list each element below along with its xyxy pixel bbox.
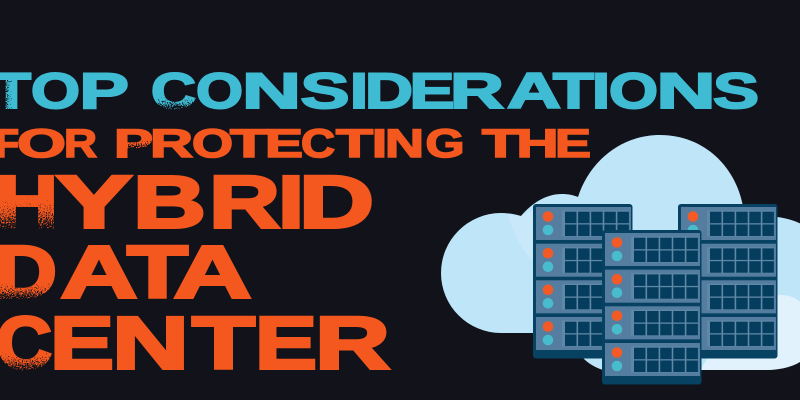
heading: data: A [174,230,252,314]
heading: top considerations: O [31,62,80,119]
heading: top considerations: C [151,62,196,119]
heading: hybrid: D [299,160,374,244]
heading: center: R [315,302,390,384]
heading: top considerations: P [80,62,128,119]
heading: for protecting the: R [64,122,97,166]
server rack: left [533,204,632,358]
heading: for protecting the: C [301,122,335,166]
distressed grain texture on letters [0,80,196,371]
heading: hybrid: R [209,160,280,244]
heading: for protecting the: H [516,122,558,166]
heading: for protecting the: R [150,122,193,166]
heading: top considerations: O [196,62,243,119]
heading: top considerations: R [450,62,504,119]
heading: center: N [112,302,189,384]
heading: hybrid: I [278,160,304,244]
heading: top considerations: E [410,62,454,119]
heading: for protecting the: T [482,122,519,166]
heading: data: A [60,230,138,314]
heading: top considerations: N [656,62,716,119]
heading: top considerations: N [242,62,301,119]
heading: center: E [50,302,114,384]
heading: center: E [255,302,317,384]
heading: hybrid: B [133,160,206,244]
heading: for protecting the: G [426,122,464,166]
heading: for protecting the: E [555,122,591,166]
cloud highlight: left wedge [508,210,533,261]
heading: for protecting the: O [17,122,66,166]
heading: top considerations: O [609,62,658,119]
heading: for protecting the: N [385,122,424,166]
heading: for protecting the: T [230,122,268,166]
heading: for protecting the: E [265,122,303,166]
heading: hybrid: Y [56,160,132,244]
heading: for protecting the: O [192,122,233,166]
heading: for protecting the: T [336,122,373,166]
cloud [441,135,800,370]
heading: top considerations: D [365,62,413,119]
illustration: cloud with server racks [441,135,800,384]
heading: top considerations: A [507,62,561,119]
heading: center: T [192,302,255,384]
heading: top considerations: S [713,62,759,119]
heading: for protecting the: P [114,122,153,166]
heading: top considerations: I [592,62,610,119]
heading: data: T [127,230,188,314]
server rack: middle [602,230,702,384]
cloud highlight: lower right [700,295,800,370]
heading: top considerations: I [350,62,368,119]
heading: top considerations: T [553,62,594,119]
heading: for protecting the: I [372,122,387,166]
heading: top considerations: S [300,62,350,119]
server rack: right [678,204,778,358]
